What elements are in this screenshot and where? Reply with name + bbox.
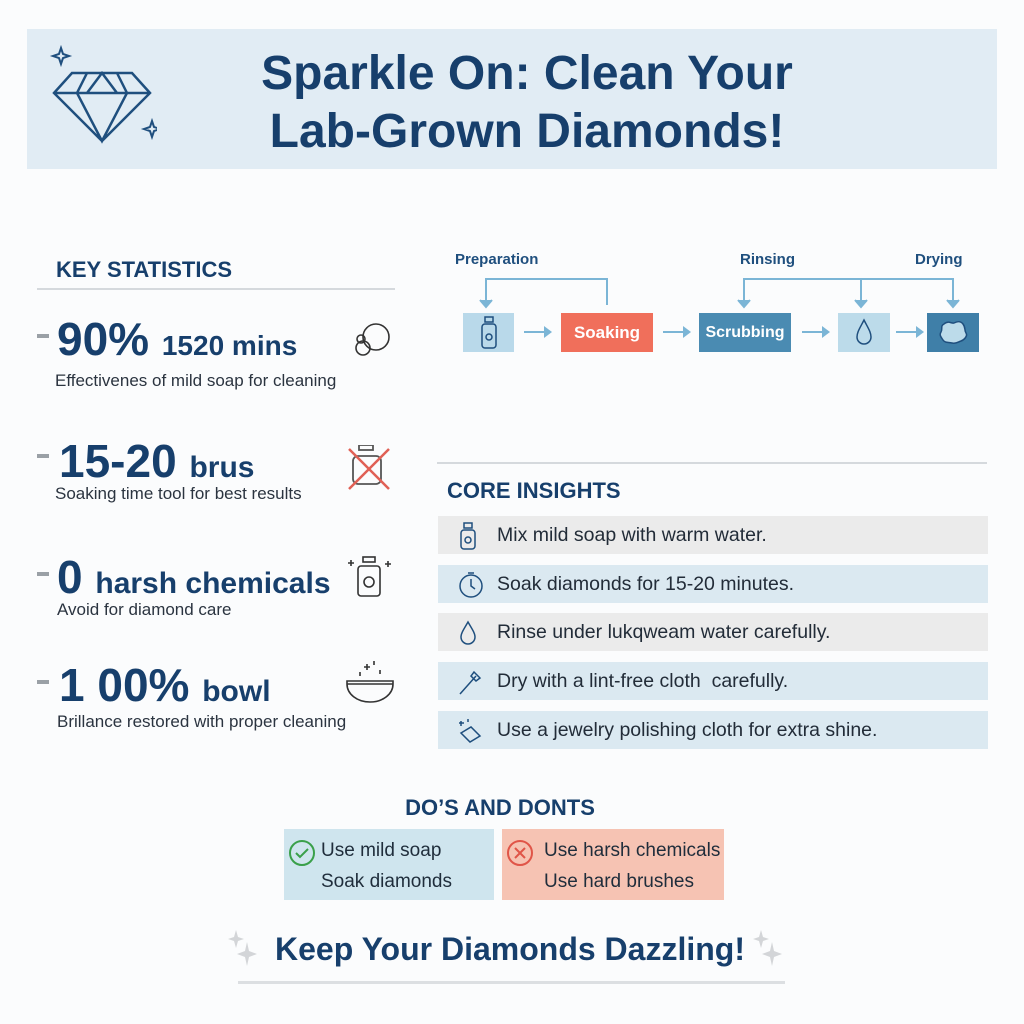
stat 2 [37,435,390,503]
title: Lab-Grown Diamonds! [270,105,784,158]
text: Rinse under lukqweam water carefully. [497,621,830,643]
stat 4: 1 00% bowl [59,659,271,711]
panel: dos: Use mild soap [321,840,441,861]
panel: dos: Soak diamonds [321,871,452,892]
process flow: Preparation [455,251,538,268]
core insights [437,462,987,464]
heading: dos and donts: DO’S AND DONTS [405,795,595,820]
panel: donts: Use harsh chemicals [544,840,720,861]
panel: donts: Use hard brushes [544,871,694,892]
text: Dry with a lint-free cloth carefully. [497,670,788,692]
process flow: Rinsing [740,251,795,268]
step: soaking [561,313,653,352]
step: preparation icon [463,313,514,352]
process flow: Drying [915,251,963,268]
stat 3: 0 harsh chemicals [57,551,330,603]
stat 4 [37,659,394,731]
footer: Keep Your Diamonds Dazzling! [275,931,745,967]
text: CORE INSIGHTS [447,478,621,503]
stat 2: Soaking time tool for best results [55,484,302,503]
step: soaking: Soaking [574,323,640,342]
stat 3 [37,551,391,619]
panel: donts [502,829,724,900]
stat 1: Effectivenes of mild soap for cleaning [55,371,336,390]
title [261,47,793,158]
insight rows: Mix mild soap with warm water. [497,524,767,546]
stat 1: 90% 1520 mins [57,313,297,365]
icon: diamond [50,45,157,144]
stat 3: Avoid for diamond care [57,600,232,619]
stat 2: 15-20 brus [59,435,254,487]
stat 4: Brillance restored with proper cleaning [57,712,346,731]
process flow [455,251,963,308]
step: rinsing drop [838,313,890,352]
insight rows [438,516,988,554]
step: scrubbing [699,313,791,352]
stat 1 [37,313,390,390]
text: Soak diamonds for 15-20 minutes. [497,573,794,595]
step: scrubbing: Scrubbing [705,324,785,341]
text: Use a jewelry polishing cloth for extra shine. [497,719,877,741]
step: drying cloth [927,313,979,352]
heading: key statistics: KEY STATISTICS [56,257,232,282]
title: Sparkle On: Clean Your [261,47,793,100]
header band [27,29,997,169]
panel: dos [284,829,494,900]
